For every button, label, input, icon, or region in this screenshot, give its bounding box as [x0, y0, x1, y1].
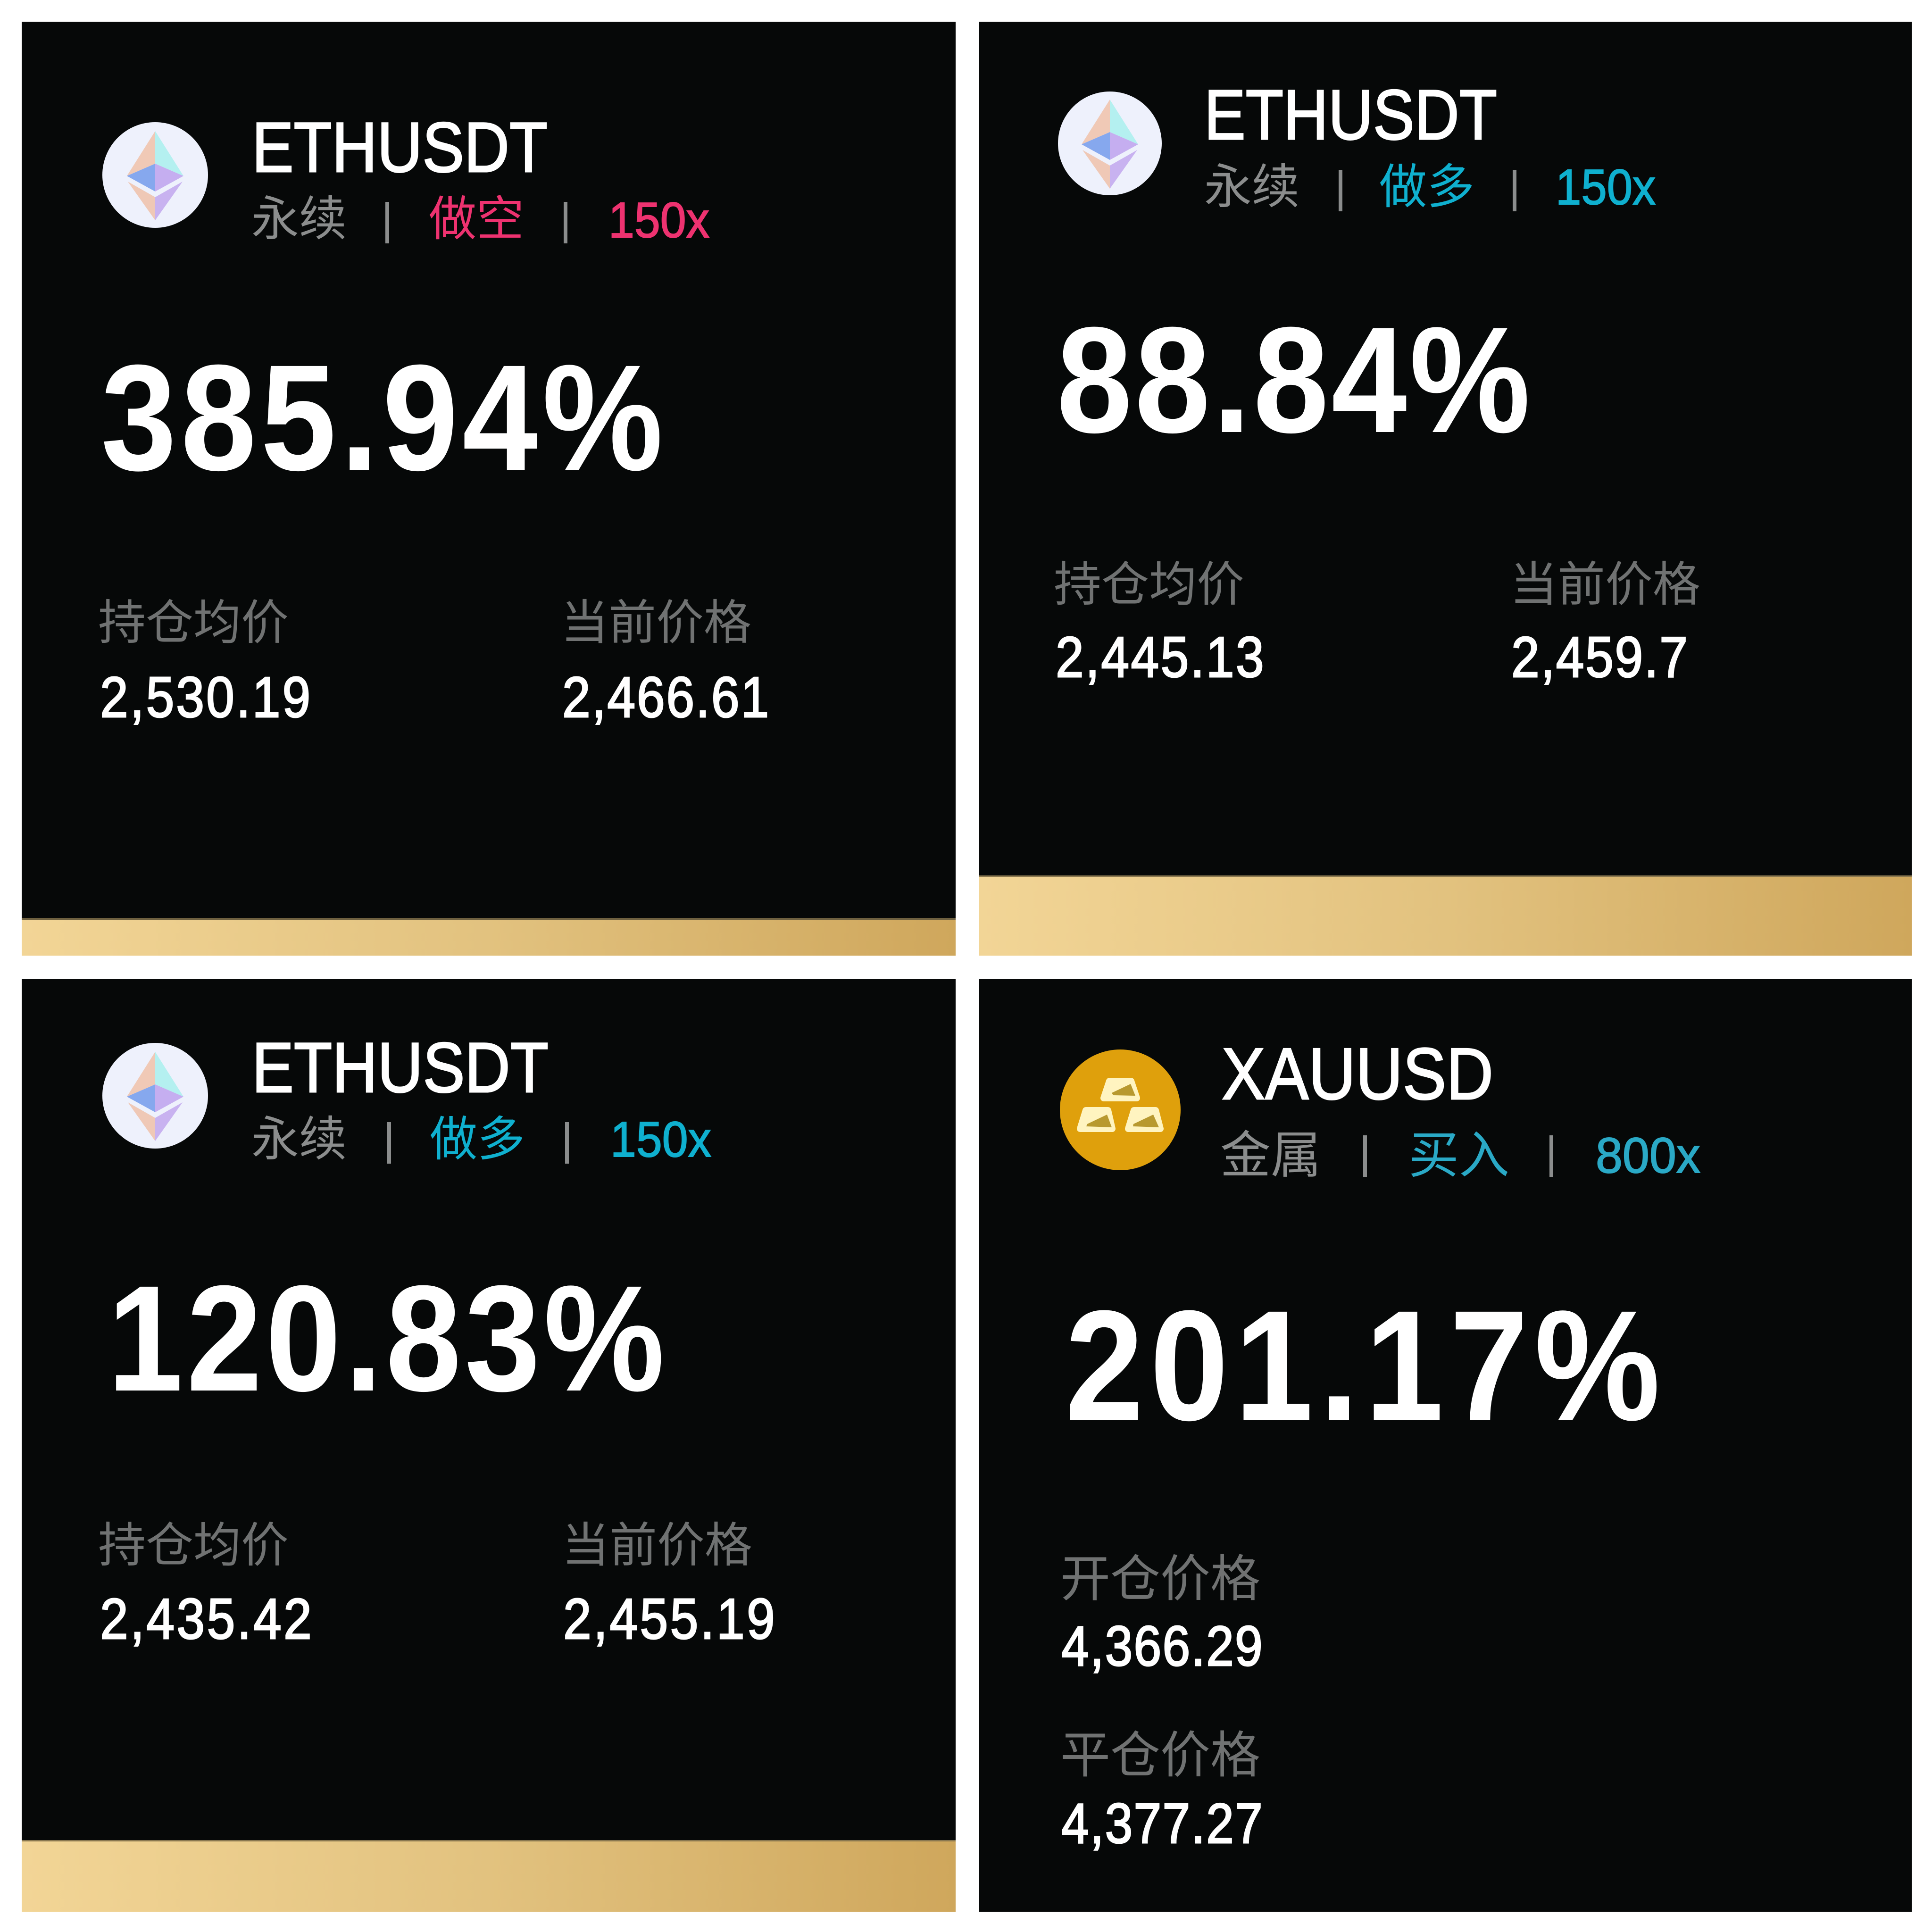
average price: [98, 1519, 312, 1651]
tag row: 150x: [610, 1112, 711, 1167]
tag row: 150x: [1556, 159, 1656, 215]
current price: 2,455.19: [563, 1587, 775, 1651]
tag row: 150x: [608, 192, 709, 248]
icon: gold bars: [1060, 1049, 1181, 1170]
current price: 2,466.61: [562, 666, 769, 730]
icon: ethereum: [1058, 92, 1162, 195]
tag row: 永续: [251, 193, 347, 246]
tag row: 做多: [430, 1113, 525, 1166]
average price: 2,530.19: [100, 666, 310, 730]
average price: [98, 597, 310, 730]
tag row: 做空: [429, 193, 524, 246]
tag row: 永续: [251, 1113, 347, 1166]
current price: 当前价格: [561, 597, 751, 650]
open price: 开仓价格: [1060, 1551, 1260, 1607]
symbol name: ETHUSDT: [1204, 75, 1497, 154]
gold bar: [22, 1840, 956, 1912]
open price: [1060, 1551, 1263, 1677]
close price: 4,377.27: [1061, 1792, 1263, 1855]
tag row: 金属: [1220, 1127, 1321, 1183]
tag row: 买入: [1408, 1127, 1509, 1183]
close price: [1060, 1728, 1263, 1855]
tag row: [251, 192, 709, 248]
current price: 当前价格: [1510, 558, 1700, 611]
current price: 当前价格: [562, 1519, 752, 1572]
panel: ETHUSDT long 120.83%: [22, 979, 956, 1912]
average price: 2,435.42: [100, 1587, 312, 1651]
average price: 2,445.13: [1056, 625, 1264, 690]
panel: XAUUSD buy 201.17%: [979, 979, 1912, 1912]
close price: 平仓价格: [1060, 1728, 1260, 1783]
tag row: 800x: [1596, 1128, 1700, 1183]
current price: 2,459.7: [1511, 625, 1688, 690]
average price: 持仓均价: [1054, 558, 1244, 611]
current price: [1510, 558, 1700, 690]
profit percentage: 120.83%: [108, 1254, 665, 1423]
current price: [561, 597, 769, 730]
current price: [562, 1519, 775, 1651]
symbol name: XAUUSD: [1222, 1033, 1493, 1115]
profit percentage: 201.17%: [1065, 1278, 1660, 1453]
tag row: [251, 1112, 711, 1167]
panel: ETHUSDT long 88.84%: [979, 22, 1912, 956]
profit percentage: 88.84%: [1057, 295, 1530, 464]
open price: 4,366.29: [1061, 1615, 1263, 1677]
panel: ETHUSDT short 385.94%: [22, 22, 956, 956]
average price: 持仓均价: [98, 597, 289, 650]
symbol name: ETHUSDT: [252, 108, 548, 187]
tag row: [1220, 1127, 1700, 1183]
icon: ethereum: [102, 1043, 208, 1149]
profit percentage: 385.94%: [101, 333, 663, 502]
tag row: 做多: [1379, 161, 1474, 214]
average price: 持仓均价: [98, 1519, 289, 1572]
gold bar: [22, 918, 956, 956]
icon: ethereum: [102, 122, 208, 228]
tag row: [1204, 159, 1656, 215]
gold bar: [979, 875, 1912, 956]
average price: [1054, 558, 1264, 690]
tag row: 永续: [1204, 161, 1299, 214]
symbol name: ETHUSDT: [252, 1028, 549, 1107]
